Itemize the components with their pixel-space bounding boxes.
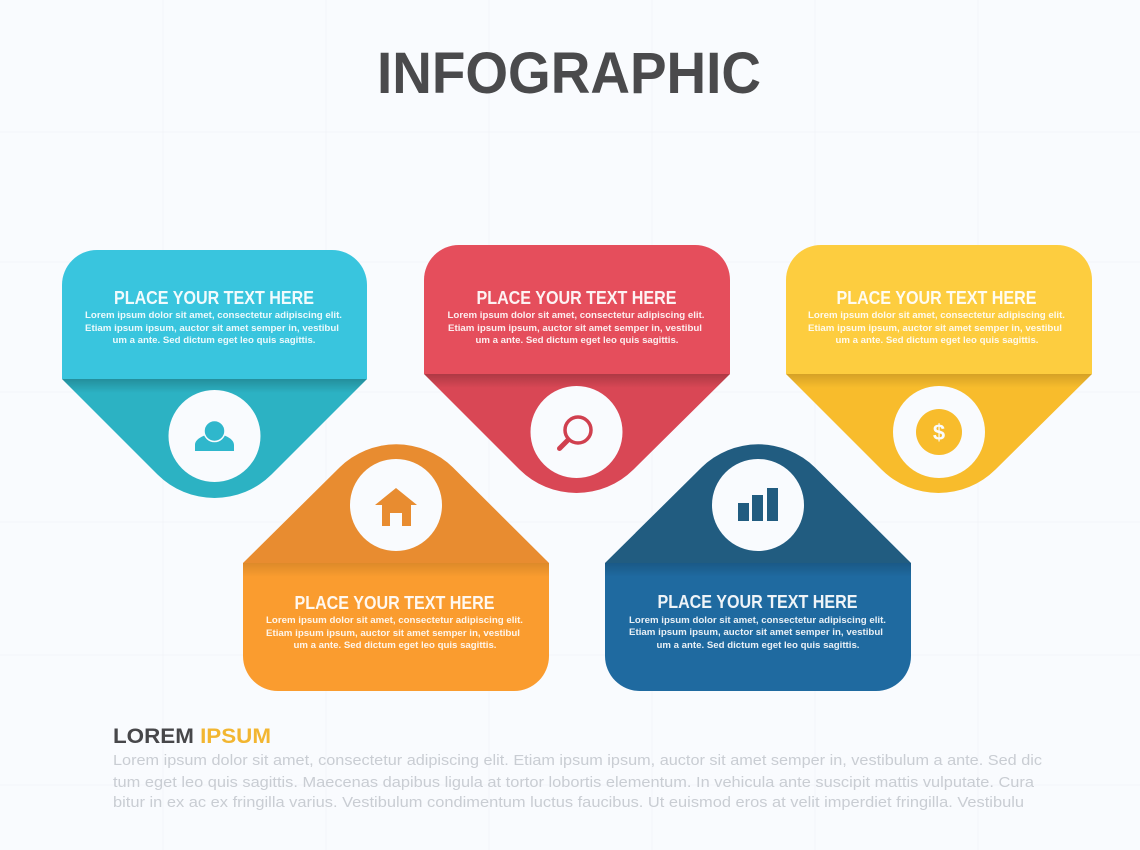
heading: PLACE YOUR TEXT HERE bbox=[836, 288, 1036, 308]
icon: person bbox=[168, 390, 260, 482]
heading: PLACE YOUR TEXT HERE bbox=[658, 592, 858, 612]
icon: magnifier bbox=[530, 386, 622, 478]
text block bbox=[85, 309, 342, 345]
footer text block bbox=[113, 752, 1043, 811]
panel: red card bbox=[424, 245, 730, 493]
text block bbox=[808, 309, 1065, 345]
icon: dollar coin: $ bbox=[933, 420, 945, 445]
footer text block: Lorem ipsum dolor sit amet, consectetur adipiscing elit. Etiam ipsum ipsum, auctor sit amet semper in, vestibulum a ante. Sed dic bbox=[113, 752, 1043, 769]
icon: dollar coin bbox=[893, 386, 985, 478]
text block: Lorem ipsum dolor sit amet, consectetur adipiscing elit. bbox=[266, 614, 523, 625]
title: INFOGRAPHIC bbox=[377, 41, 761, 106]
text block: Lorem ipsum dolor sit amet, consectetur adipiscing elit. bbox=[808, 309, 1065, 320]
fold flap bbox=[62, 379, 367, 498]
text block: um a ante. Sed dictum eget leo quis sagittis. bbox=[294, 639, 496, 650]
text block: um a ante. Sed dictum eget leo quis sagittis. bbox=[836, 334, 1038, 345]
footer heading: LOREM IPSUM bbox=[113, 725, 271, 748]
text block: Etiam ipsum ipsum, auctor sit amet semper in, vestibul bbox=[808, 322, 1062, 333]
text block: Etiam ipsum ipsum, auctor sit amet semper in, vestibul bbox=[629, 626, 883, 637]
text block: Lorem ipsum dolor sit amet, consectetur adipiscing elit. bbox=[85, 309, 342, 320]
panel: yellow card bbox=[786, 245, 1092, 493]
panel: orange card bbox=[243, 444, 549, 691]
text block bbox=[448, 309, 704, 345]
fold flap bbox=[424, 374, 730, 493]
icon: bar chart bbox=[712, 459, 804, 551]
footer text block: bitur in ex ac ex fringilla varius. Vestibulum condimentum luctus faucibus. Ut euismod eros at velit imperdiet fringilla. Vestibulu bbox=[113, 794, 1024, 811]
card body bbox=[424, 245, 730, 374]
panel: blue card bbox=[605, 444, 911, 691]
fold flap bbox=[605, 444, 911, 563]
text block bbox=[629, 614, 886, 650]
card body bbox=[62, 250, 367, 379]
footer text block: tum eget leo quis sagittis. Maecenas dapibus ligula at tortor lobortis elementum. In vehicula ante suscipit mattis vulputate. Cura bbox=[113, 774, 1035, 791]
card body bbox=[243, 563, 549, 691]
icon: house bbox=[350, 459, 442, 551]
text block: Etiam ipsum ipsum, auctor sit amet semper in, vestibul bbox=[266, 627, 520, 638]
text block: Lorem ipsum dolor sit amet, consectetur adipiscing elit. bbox=[629, 614, 886, 625]
fold flap bbox=[786, 374, 1092, 493]
text block: um a ante. Sed dictum eget leo quis sagittis. bbox=[476, 334, 678, 345]
card body bbox=[786, 245, 1092, 374]
fold flap bbox=[243, 444, 549, 563]
text block bbox=[266, 614, 523, 650]
text block: Etiam ipsum ipsum, auctor sit amet semper in, vestibul bbox=[448, 322, 702, 333]
text block: um a ante. Sed dictum eget leo quis sagittis. bbox=[112, 334, 316, 345]
heading: PLACE YOUR TEXT HERE bbox=[476, 288, 676, 308]
text block: Lorem ipsum dolor sit amet, consectetur adipiscing elit. bbox=[448, 309, 704, 320]
panel: cyan card bbox=[62, 250, 367, 498]
text block: Etiam ipsum ipsum, auctor sit amet semper in, vestibul bbox=[85, 322, 339, 333]
heading: PLACE YOUR TEXT HERE bbox=[294, 593, 494, 613]
heading: PLACE YOUR TEXT HERE bbox=[114, 288, 314, 308]
text block: um a ante. Sed dictum eget leo quis sagittis. bbox=[656, 639, 860, 650]
card body bbox=[605, 563, 911, 691]
